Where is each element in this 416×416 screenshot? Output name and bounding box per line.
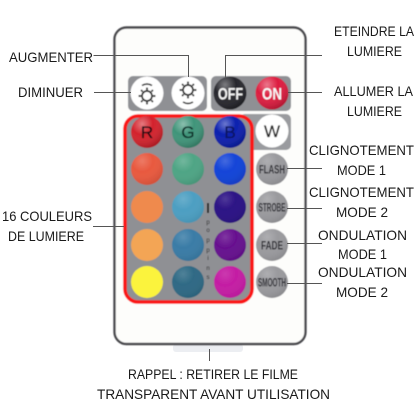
button: off: OFF xyxy=(218,84,243,104)
label: eteindre: LUMIERE xyxy=(347,43,402,59)
panel: brightness buttons xyxy=(128,76,207,111)
panel: power buttons xyxy=(211,76,291,111)
button: decrease brightness xyxy=(172,76,204,110)
button: red: R xyxy=(141,123,153,142)
label: ondulation 2 xyxy=(318,264,407,300)
vertical brand text xyxy=(206,203,210,281)
button: green xyxy=(172,116,204,148)
label: 16 couleurs: 16 COULEURS xyxy=(2,208,92,224)
panel: colour buttons xyxy=(125,116,252,302)
label: clignotement 1: MODE 1 xyxy=(337,162,386,178)
button: increase brightness xyxy=(130,76,164,110)
label: eteindre xyxy=(334,23,415,59)
button: flash: FLASH xyxy=(259,162,285,176)
label: rappel: RAPPEL : RETIRER LE FILME xyxy=(128,366,298,382)
button: blue: B xyxy=(224,123,236,142)
label: ondulation 2: MODE 2 xyxy=(336,284,388,300)
label: 16 couleurs xyxy=(2,208,92,244)
vertical brand text: n xyxy=(206,266,210,272)
button: red xyxy=(131,116,163,148)
vertical brand text: i xyxy=(207,256,209,262)
button: flash xyxy=(256,153,288,185)
button: green: G xyxy=(181,123,195,142)
button: smooth xyxy=(256,266,288,298)
button: fade xyxy=(256,229,288,261)
vertical brand text: o xyxy=(206,228,210,234)
remote body xyxy=(114,28,306,344)
label: clignotement 2: MODE 2 xyxy=(336,204,388,220)
panel: white button backing xyxy=(240,114,291,150)
button: on: ON xyxy=(262,84,282,104)
vertical brand text: p xyxy=(206,248,210,254)
button: blue xyxy=(214,116,246,148)
label: diminuer: DIMINUER xyxy=(18,84,83,100)
vertical brand text: p xyxy=(206,238,210,244)
leader lines xyxy=(93,56,322,361)
label: ondulation 1: MODE 1 xyxy=(338,246,387,262)
label: clignotement 2 xyxy=(309,184,414,220)
label: 16 couleurs: DE LUMIERE xyxy=(8,228,84,244)
label: ondulation 2: ONDULATION xyxy=(318,264,407,280)
film tab xyxy=(173,344,243,352)
button: white xyxy=(256,114,288,148)
button: smooth: SMOOTH xyxy=(258,276,286,290)
label: allumer xyxy=(334,83,414,119)
button: strobe xyxy=(256,191,288,223)
label: ondulation 1 xyxy=(318,227,407,262)
button: white: W xyxy=(264,122,280,141)
remote control xyxy=(114,28,306,344)
label: augmenter: AUGMENTER xyxy=(9,49,93,65)
button: fade: FADE xyxy=(261,238,283,252)
vertical brand text: p xyxy=(206,220,210,226)
label: clignotement 1 xyxy=(309,142,414,178)
vertical brand text: s xyxy=(206,275,210,281)
label: ondulation 1: ONDULATION xyxy=(318,227,407,243)
label: rappel: TRANSPARENT AVANT UTILISATION xyxy=(97,386,330,402)
colour swatches xyxy=(131,153,246,298)
button: strobe: STROBE xyxy=(258,200,286,214)
label: rappel xyxy=(97,366,330,402)
label: allumer: LUMIERE xyxy=(347,103,402,119)
